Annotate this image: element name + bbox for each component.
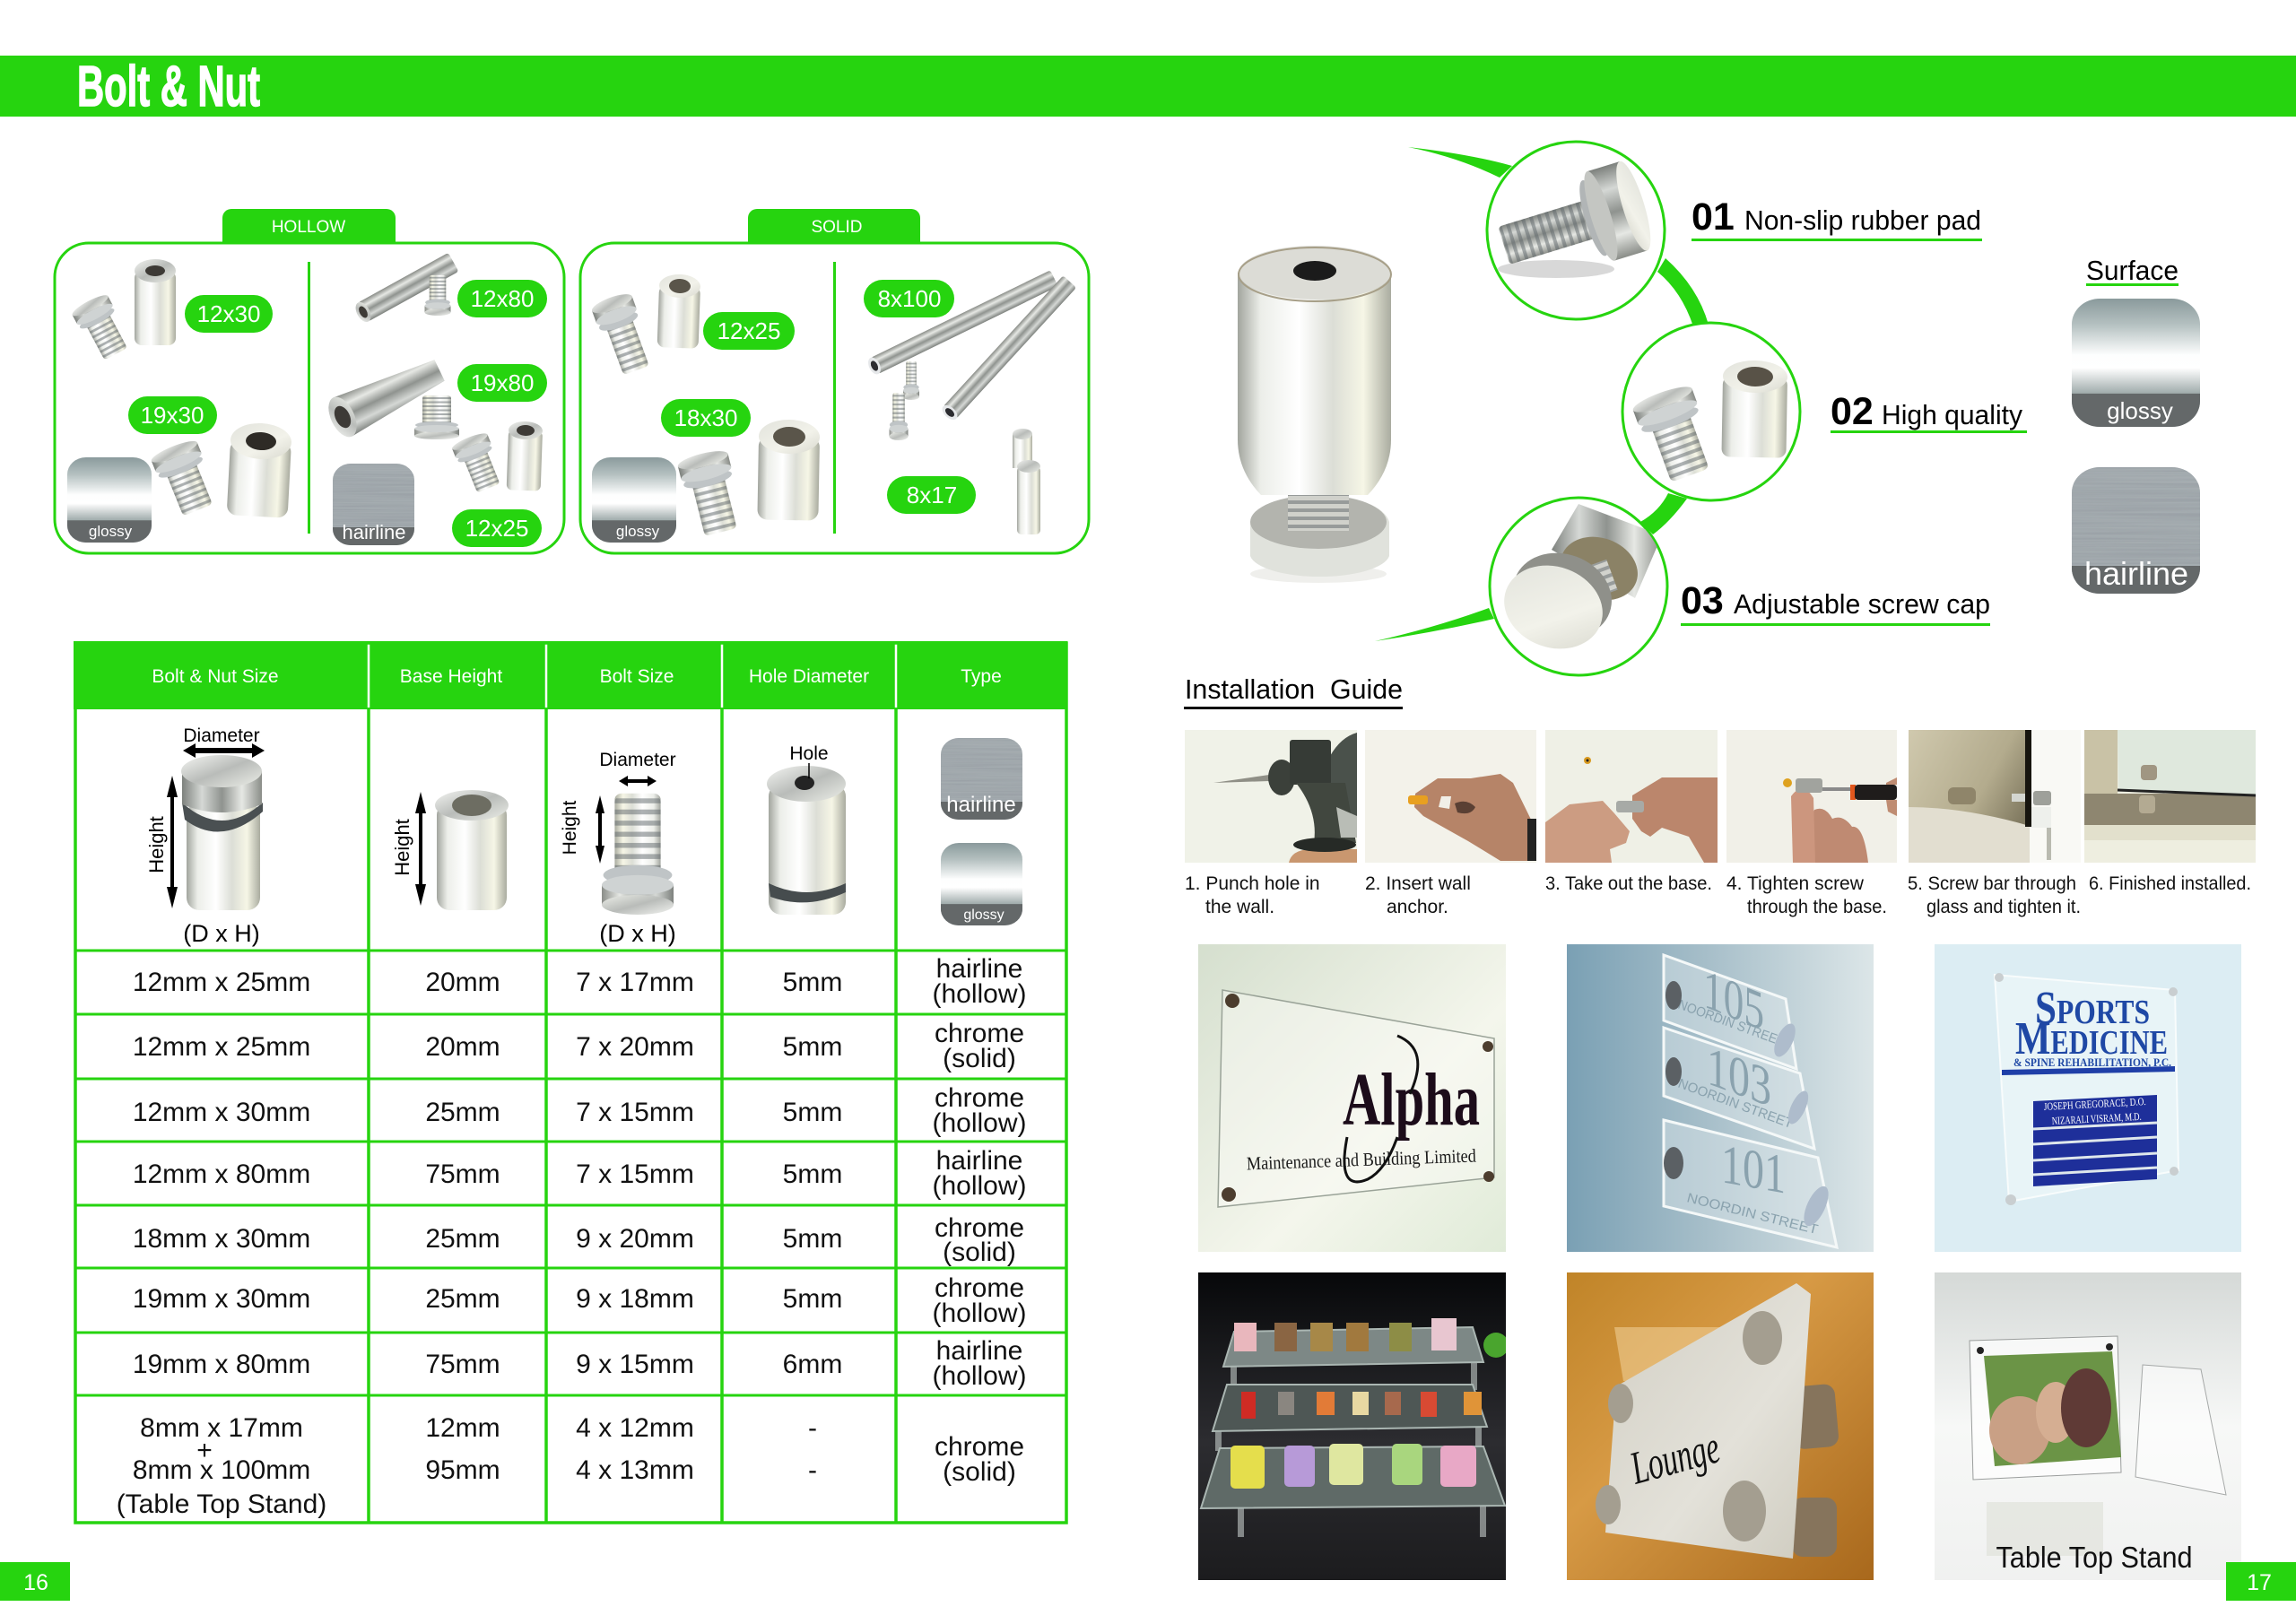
table data rows: 12mm x 25mm bbox=[133, 1032, 310, 1062]
photo: room number plates bbox=[1567, 944, 1874, 1252]
table data rows: (hollow) bbox=[932, 1298, 1027, 1328]
photo: room number plates: 103 bbox=[1707, 1034, 1771, 1119]
diagram: bolt size: Diameter bbox=[599, 750, 676, 770]
step 2 photo: wall anchor bbox=[1365, 730, 1536, 863]
installation captions: 3. Take out the base. bbox=[1545, 873, 1712, 894]
table data rows: 9 x 18mm bbox=[576, 1284, 694, 1314]
step 3 photo: take out base bbox=[1545, 730, 1718, 863]
size pills: 12x25 bbox=[465, 515, 528, 542]
table header: Base Height bbox=[400, 666, 502, 687]
page number 16 bbox=[0, 1562, 70, 1601]
installation captions: through the base. bbox=[1747, 897, 1887, 917]
callout 01: rubber pad bbox=[1487, 142, 1982, 319]
surface options: hairline bbox=[2084, 555, 2188, 592]
callout 03: screw cap bbox=[1490, 498, 1990, 675]
diagram: bolt and nut size: Height bbox=[145, 816, 168, 873]
swatch: hairline: hairline bbox=[343, 521, 405, 543]
table data rows: 7 x 15mm bbox=[576, 1159, 694, 1189]
photo: room number plates: NOORDIN STREET bbox=[1685, 1190, 1820, 1238]
photo: food display stand bbox=[1198, 1272, 1506, 1580]
table header: Hole Diameter bbox=[749, 666, 869, 687]
size pills: 8x100 bbox=[878, 285, 941, 312]
table data rows: 9 x 15mm bbox=[576, 1350, 694, 1379]
swatch: hairline bbox=[333, 464, 414, 545]
table header bbox=[74, 641, 1067, 709]
installation captions: 4. Tighten screw bbox=[1726, 873, 1865, 894]
callout 02: high quality: 02 bbox=[1831, 390, 1874, 433]
table data rows: chrome bbox=[935, 1213, 1024, 1243]
table data rows: - bbox=[808, 1413, 817, 1443]
diagram: bolt and nut size: Diameter bbox=[183, 725, 260, 746]
diagram: bolt and nut size bbox=[145, 725, 265, 947]
callout 03: screw cap: Adjustable screw cap bbox=[1734, 588, 1990, 620]
table data rows: 5mm bbox=[783, 1284, 842, 1314]
table data rows: 25mm bbox=[425, 1224, 500, 1254]
table data rows: 7 x 17mm bbox=[576, 968, 694, 997]
table header: Bolt Size bbox=[600, 666, 674, 687]
table data rows: 5mm bbox=[783, 968, 842, 997]
hollow parts bbox=[70, 253, 543, 519]
table data rows: 4 x 12mm bbox=[576, 1413, 694, 1443]
photo: table top stand bbox=[1935, 1272, 2241, 1580]
table data rows: 8mm x 100mm bbox=[133, 1455, 310, 1485]
panel: hollow: HOLLOW bbox=[272, 218, 345, 237]
swatch: glossy: glossy bbox=[616, 523, 660, 540]
table data rows: hairline bbox=[936, 954, 1022, 984]
table data rows: (Table Top Stand) bbox=[117, 1489, 326, 1519]
diagram: base height bbox=[391, 790, 509, 910]
page number 17: 17 bbox=[2247, 1570, 2272, 1595]
callout 01: rubber pad: 01 bbox=[1692, 195, 1735, 239]
photo: sports medicine sign: SPORTS bbox=[2035, 983, 2150, 1034]
table data rows: 20mm bbox=[425, 968, 500, 997]
step 4 photo: tighten screw bbox=[1726, 730, 1897, 863]
installation captions: 2. Insert wall bbox=[1365, 873, 1471, 894]
diagram: hole diameter bbox=[767, 743, 846, 915]
size pills: 12x25 bbox=[718, 317, 780, 344]
table data rows: chrome bbox=[935, 1019, 1024, 1048]
installation captions: glass and tighten it. bbox=[1926, 897, 2081, 917]
table data rows: 12mm x 80mm bbox=[133, 1159, 310, 1189]
heading: installation guide: Installation Guide bbox=[1185, 673, 1403, 705]
table data rows: (hollow) bbox=[932, 1108, 1027, 1138]
size pills bbox=[661, 280, 976, 514]
diagram: bolt and nut size: (D x H) bbox=[183, 920, 260, 947]
table data rows: 6mm bbox=[783, 1350, 842, 1379]
panel: solid: SOLID bbox=[811, 218, 863, 237]
size pills: 12x80 bbox=[471, 285, 534, 312]
diagram: bolt size bbox=[560, 750, 676, 947]
main product cylinder bbox=[1238, 246, 1391, 583]
table header: Bolt & Nut Size bbox=[152, 666, 279, 687]
table data rows: 12mm bbox=[425, 1413, 500, 1443]
photo: room number plates: 105 bbox=[1703, 957, 1764, 1043]
swatch: glossy: glossy bbox=[89, 523, 133, 540]
photo: table top stand: Table Top Stand bbox=[1996, 1541, 2192, 1574]
table data rows: 25mm bbox=[425, 1098, 500, 1127]
surface options bbox=[2072, 255, 2200, 594]
callout 02: high quality bbox=[1622, 323, 2027, 500]
table data rows: 9 x 20mm bbox=[576, 1224, 694, 1254]
header band bbox=[0, 54, 2296, 118]
diagram: bolt size: Height bbox=[560, 800, 580, 855]
table data rows: chrome bbox=[935, 1083, 1024, 1113]
callout 02: high quality: High quality bbox=[1882, 399, 2022, 430]
swatches: type: hairline bbox=[946, 793, 1016, 817]
table data rows: - bbox=[808, 1455, 817, 1485]
photo: Alpha sign bbox=[1198, 944, 1506, 1252]
installation captions: 5. Screw bar through bbox=[1908, 873, 2076, 894]
table data rows: 75mm bbox=[425, 1350, 500, 1379]
table data rows: (hollow) bbox=[932, 979, 1027, 1009]
table data rows: 5mm bbox=[783, 1098, 842, 1127]
panel: solid bbox=[580, 209, 1089, 553]
table data rows: (hollow) bbox=[932, 1171, 1027, 1201]
table data rows: 4 x 13mm bbox=[576, 1455, 694, 1485]
diagram: hole diameter: Hole bbox=[789, 743, 829, 764]
table data rows: hairline bbox=[936, 1146, 1022, 1176]
table data rows: 18mm x 30mm bbox=[133, 1224, 310, 1254]
size pills: 18x30 bbox=[674, 404, 737, 431]
table data rows: 8mm x 17mm bbox=[140, 1413, 303, 1443]
photo: sports medicine sign: & SPINE REHABILITATION, P.C. bbox=[2013, 1055, 2171, 1069]
table data rows: 5mm bbox=[783, 1032, 842, 1062]
size pills: 8x17 bbox=[907, 482, 957, 508]
photo: sports medicine sign: NIZARALI VISRAM, M.D. bbox=[2051, 1110, 2142, 1127]
installation captions: anchor. bbox=[1387, 897, 1448, 917]
installation captions: 1. Punch hole in bbox=[1185, 873, 1320, 894]
swoosh arcs bbox=[1375, 147, 1709, 641]
photo: lounge sign bbox=[1567, 1272, 1874, 1580]
table data rows: 19mm x 80mm bbox=[133, 1350, 310, 1379]
photo: room number plates: NOORDIN STREET bbox=[1676, 997, 1787, 1050]
page number 16: 16 bbox=[23, 1570, 48, 1595]
diagram: bolt size: (D x H) bbox=[599, 920, 676, 947]
panel: hollow bbox=[55, 209, 564, 553]
table data rows: (solid) bbox=[943, 1238, 1016, 1267]
photo: sports medicine sign bbox=[1935, 944, 2241, 1252]
page number 17 bbox=[2226, 1562, 2296, 1601]
table data rows: (hollow) bbox=[932, 1361, 1027, 1391]
callout 03: screw cap: 03 bbox=[1681, 579, 1724, 622]
size pills bbox=[128, 280, 547, 547]
step 6 photo: finished bbox=[2084, 730, 2256, 863]
photo: Alpha sign: Maintenance and Building Limited bbox=[1246, 1145, 1477, 1174]
table data rows: 7 x 15mm bbox=[576, 1098, 694, 1127]
photo: lounge sign: Lounge bbox=[1624, 1422, 1725, 1495]
solid parts bbox=[590, 270, 1076, 538]
photo: sports medicine sign: JOSEPH GREGORACE, D.O. bbox=[2043, 1095, 2146, 1113]
table data rows bbox=[117, 954, 1027, 1519]
installation captions bbox=[1185, 873, 2251, 917]
title: Bolt & Nut bbox=[77, 54, 260, 118]
size pills: 12x30 bbox=[197, 300, 260, 327]
table data rows: chrome bbox=[935, 1273, 1024, 1303]
table data rows: 7 x 20mm bbox=[576, 1032, 694, 1062]
surface options: glossy bbox=[2107, 397, 2173, 424]
table data rows: chrome bbox=[935, 1432, 1024, 1462]
installation captions: the wall. bbox=[1205, 897, 1274, 917]
table data rows: 12mm x 25mm bbox=[133, 968, 310, 997]
swatch: glossy bbox=[592, 457, 676, 543]
swatch: glossy bbox=[67, 457, 152, 543]
table data rows: 20mm bbox=[425, 1032, 500, 1062]
callout 01: rubber pad: Non-slip rubber pad bbox=[1744, 204, 1981, 236]
size pills: 19x30 bbox=[141, 402, 204, 429]
swatches: type: glossy bbox=[963, 908, 1004, 923]
table data rows: 5mm bbox=[783, 1159, 842, 1189]
table data rows: (solid) bbox=[943, 1457, 1016, 1487]
photo: room number plates: 101 bbox=[1721, 1132, 1786, 1206]
table data rows: 95mm bbox=[425, 1455, 500, 1485]
installation captions: 6. Finished installed. bbox=[2089, 873, 2251, 894]
surface options: Surface bbox=[2086, 255, 2179, 286]
swatches: type bbox=[941, 738, 1022, 925]
table data rows: 75mm bbox=[425, 1159, 500, 1189]
table data rows: 25mm bbox=[425, 1284, 500, 1314]
table header: Type bbox=[961, 666, 1002, 687]
photo: sports medicine sign: MEDICINE bbox=[2015, 1013, 2168, 1064]
table data rows: 19mm x 30mm bbox=[133, 1284, 310, 1314]
diagram: base height: Height bbox=[391, 819, 413, 876]
size pills: 19x80 bbox=[471, 369, 534, 396]
step 1 photo: drill bbox=[1185, 730, 1357, 863]
table data rows: (solid) bbox=[943, 1044, 1016, 1073]
specification table bbox=[74, 641, 1067, 1523]
table data rows: 12mm x 30mm bbox=[133, 1098, 310, 1127]
photo: room number plates: NOORDIN STREET bbox=[1676, 1076, 1795, 1132]
table data rows: + bbox=[196, 1436, 213, 1465]
step 5 photo: screw bar through glass bbox=[1909, 730, 2081, 863]
table data rows: 5mm bbox=[783, 1224, 842, 1254]
table data rows: hairline bbox=[936, 1336, 1022, 1366]
